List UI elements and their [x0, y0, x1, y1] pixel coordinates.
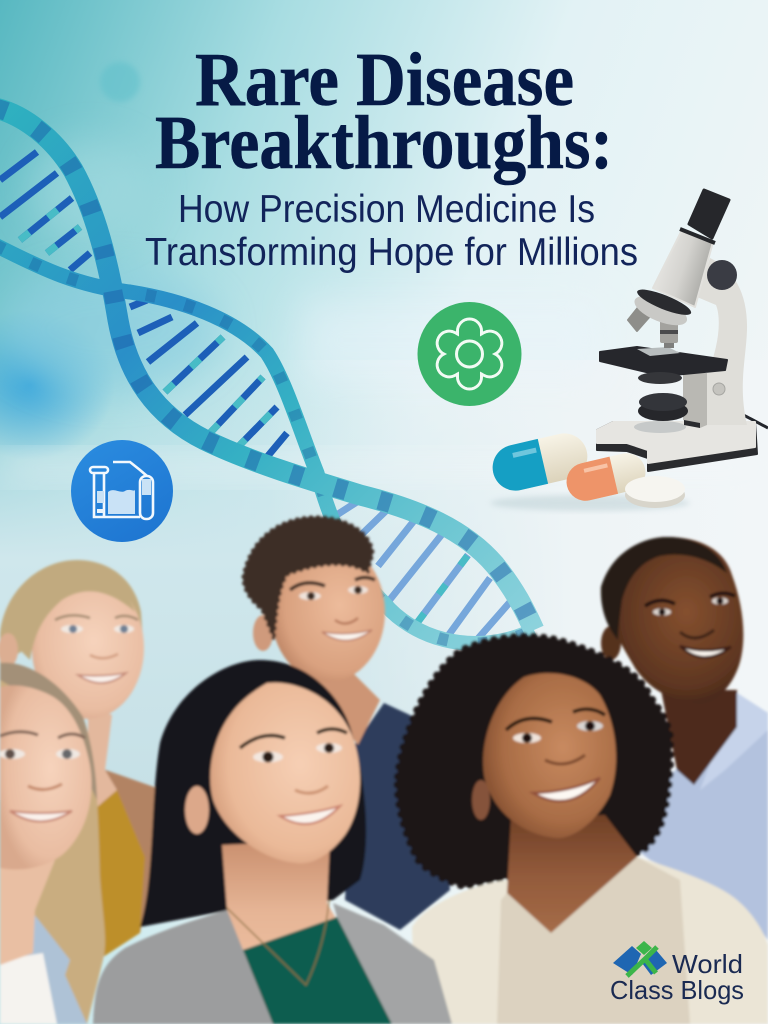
condenser	[638, 393, 688, 421]
logo text: Class Blogs	[610, 975, 744, 1005]
microscope tube	[653, 229, 715, 307]
pills	[488, 429, 690, 511]
logo text: World	[672, 949, 743, 979]
subtitle	[145, 188, 638, 274]
objectives	[628, 305, 678, 348]
eyepiece	[689, 190, 729, 238]
man, centre back, navy shirt	[243, 517, 450, 930]
logo: World Class Blogs	[610, 941, 744, 1005]
title	[155, 38, 613, 185]
microscope	[597, 190, 768, 471]
focus knob	[707, 260, 737, 290]
woman, lower left, long hair	[0, 663, 105, 1024]
DNA strand one	[0, 108, 534, 630]
microscope base	[597, 421, 757, 471]
microscope stage	[600, 347, 727, 384]
DNA double helix	[0, 108, 534, 643]
man, right, blue shirt	[601, 537, 768, 940]
logo mark	[613, 941, 667, 976]
cardigan right sleeve, front woman	[333, 903, 452, 1024]
title: Rare Disease	[195, 38, 574, 122]
title: Breakthroughs:	[155, 101, 613, 185]
icon: blue lab equipment	[71, 440, 173, 542]
woman, front right, curly hair	[397, 636, 768, 1024]
DNA strand two	[0, 245, 534, 643]
icon: green flower	[418, 302, 522, 406]
white tablet	[625, 476, 685, 508]
woman, front centre, black hair	[93, 660, 392, 1024]
logo text	[610, 949, 744, 1005]
nosepiece	[630, 285, 694, 332]
people	[0, 517, 768, 1024]
subtitle: Transforming Hope for Millions	[145, 231, 638, 274]
blue capsule	[488, 429, 592, 495]
woman, upper left, mustard shirt	[0, 560, 157, 957]
microscope arm	[697, 258, 747, 425]
subtitle: How Precision Medicine Is	[178, 188, 595, 231]
orange capsule	[563, 449, 649, 505]
